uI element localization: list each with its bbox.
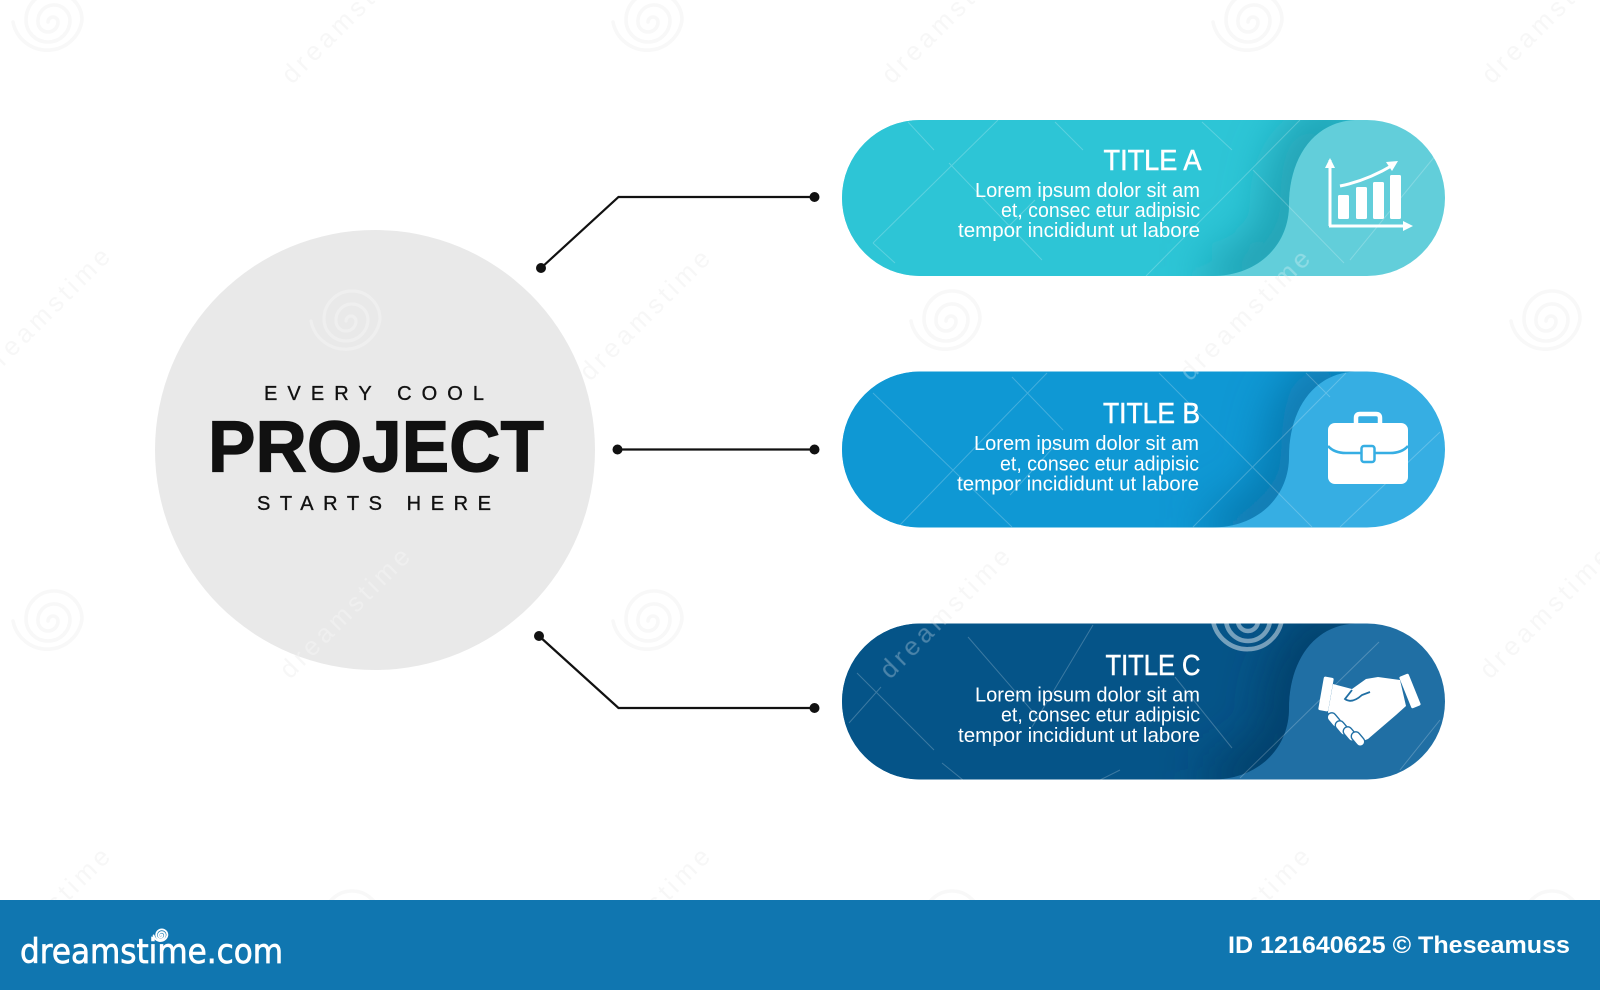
body B <box>957 433 1199 496</box>
pill panel B <box>842 372 1445 528</box>
watermark overlay <box>848 120 1440 780</box>
connector C <box>534 631 820 713</box>
line: starts here: STARTS HERE <box>257 493 491 515</box>
body B: et, consec etur adipisic <box>1000 454 1199 476</box>
text block C <box>958 650 1200 747</box>
central circle <box>155 230 595 670</box>
icon: growth chart <box>1325 158 1413 231</box>
body C: Lorem ipsum dolor sit am <box>975 684 1200 706</box>
icon: briefcase <box>1328 414 1408 484</box>
body A <box>958 180 1200 242</box>
footer logo: dreamstime.com <box>20 932 283 972</box>
body A: Lorem ipsum dolor sit am <box>975 180 1200 202</box>
title C: TITLE C <box>1106 650 1200 682</box>
pill panel A <box>842 120 1445 276</box>
watermark pattern: dreamstime <box>1173 841 1316 984</box>
watermark pattern: dreamstime <box>273 541 416 684</box>
watermark pattern: dreamstime <box>1173 243 1316 386</box>
line: every cool: EVERY COOL <box>264 383 484 405</box>
watermark overlay: dreamstime <box>573 243 716 386</box>
body B: tempor incididunt ut labore <box>957 474 1199 496</box>
footer bar <box>0 900 1600 990</box>
text block B <box>957 398 1200 496</box>
footer credit: ID 121640625 © Theseamuss <box>1228 932 1570 959</box>
body A: et, consec etur adipisic <box>1001 200 1200 222</box>
watermark pattern: dreamstime <box>873 541 1016 684</box>
watermark pattern: dreamstime <box>573 243 716 386</box>
body C: tempor incididunt ut labore <box>958 725 1200 747</box>
title B: TITLE B <box>1103 398 1200 430</box>
watermark overlay: dreamstime <box>1173 243 1316 386</box>
body B: Lorem ipsum dolor sit am <box>974 433 1199 455</box>
title A: TITLE A <box>1104 145 1202 177</box>
icon: handshake <box>1318 673 1421 748</box>
connector B <box>612 444 820 454</box>
central circle text <box>208 383 544 515</box>
body A: tempor incididunt ut labore <box>958 220 1200 242</box>
watermark overlay: dreamstime <box>273 541 416 684</box>
body C <box>958 684 1200 747</box>
text block A <box>958 145 1202 242</box>
watermark pattern: dreamstime <box>573 841 716 984</box>
pill panel C <box>842 624 1445 780</box>
connector A <box>536 192 820 273</box>
watermark overlay: dreamstime <box>873 541 1016 684</box>
line: project: PROJECT <box>208 406 544 488</box>
body C: et, consec etur adipisic <box>1001 704 1200 726</box>
